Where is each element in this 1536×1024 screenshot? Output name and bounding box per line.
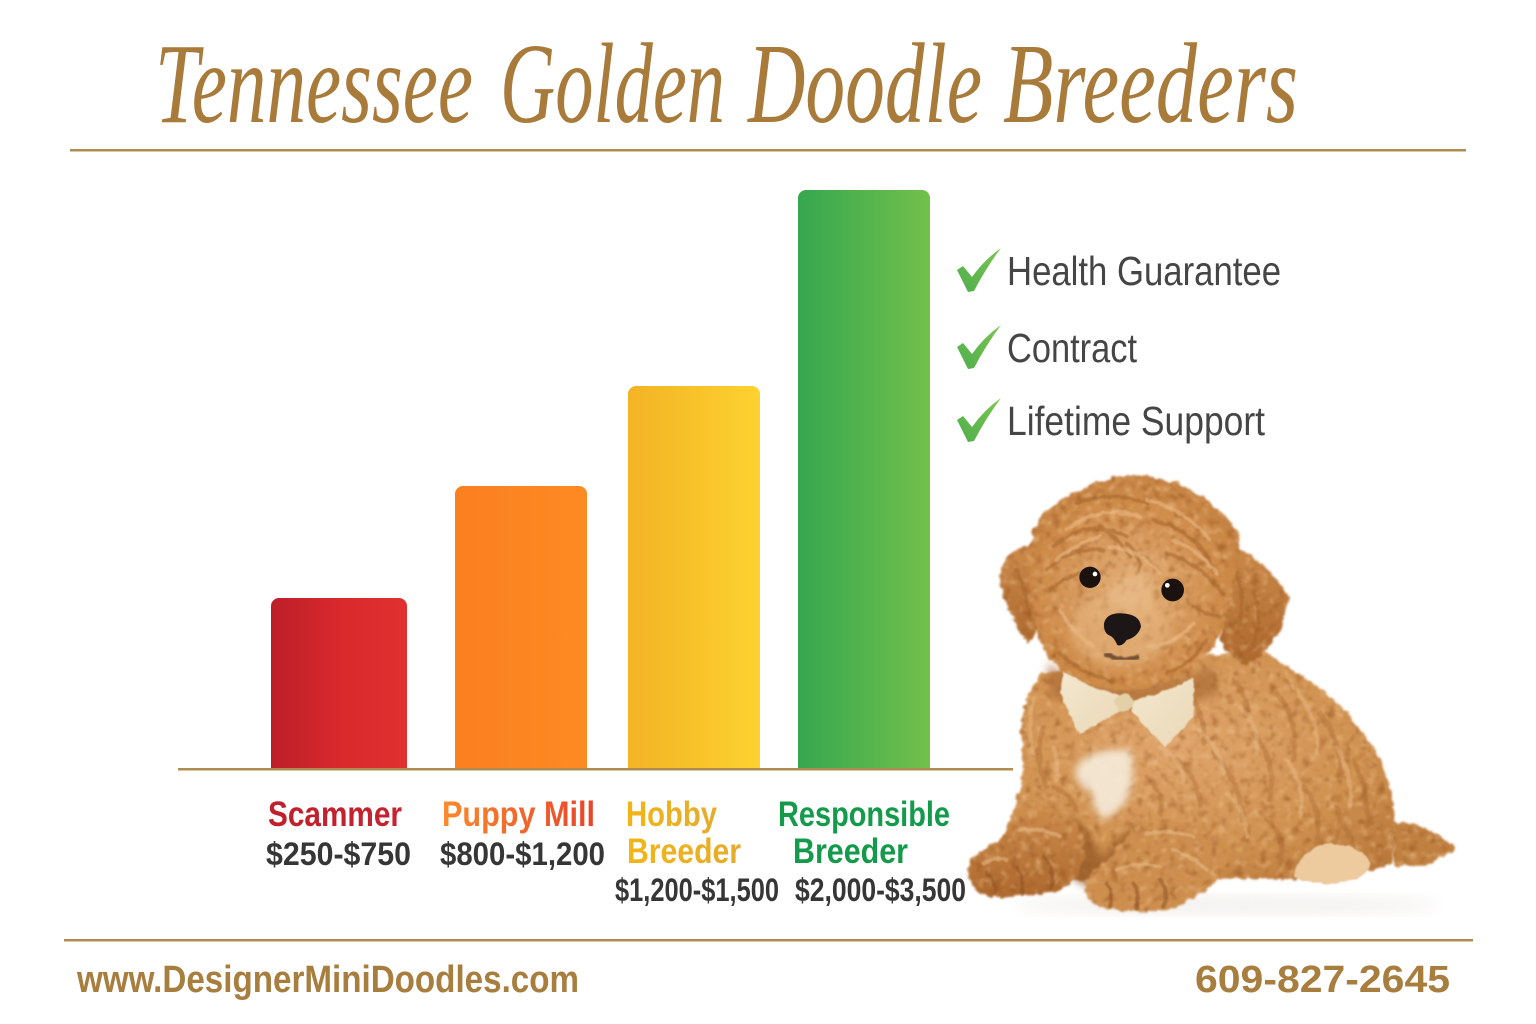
checklist	[957, 248, 1281, 444]
title: Breeders	[1003, 20, 1298, 147]
head	[1029, 475, 1241, 690]
left eye	[1079, 567, 1101, 588]
title: Golden	[500, 20, 725, 147]
nose	[1104, 613, 1141, 646]
bar chart	[178, 190, 1013, 770]
tail	[1393, 822, 1457, 867]
left ear	[998, 543, 1056, 643]
leg fur detail	[983, 829, 1207, 908]
puppy illustration	[968, 475, 1457, 915]
phone number: 609-827-2645	[1195, 959, 1450, 1001]
label: Responsible Breeder: Responsible	[778, 795, 950, 834]
icon: check 3	[957, 398, 1001, 442]
text: Contract: Contract	[1007, 325, 1138, 371]
white chest	[1075, 750, 1133, 820]
bar: Responsible Breeder	[798, 190, 930, 769]
label: Puppy Mill	[440, 795, 605, 872]
mouth	[1107, 654, 1137, 659]
head fur detail	[1017, 497, 1258, 680]
label: Hobby Breeder: $1,200-$1,500	[615, 872, 779, 908]
left front leg and paw	[968, 810, 1085, 897]
website: www.DesignerMiniDoodles.com	[76, 959, 579, 1001]
bow tie	[1060, 672, 1194, 747]
icon: check 1	[957, 248, 1001, 292]
label: Scammer: $250-$750	[266, 836, 411, 872]
bar: Hobby Breeder	[628, 386, 760, 769]
title: Doodle	[747, 20, 982, 147]
label: Responsible Breeder	[778, 795, 966, 908]
leg shadow	[1070, 813, 1147, 890]
text: Health Guarantee: Health Guarantee	[1007, 248, 1281, 294]
right front leg and paw	[1085, 822, 1227, 911]
bar: Puppy Mill	[455, 486, 587, 769]
title: Tennessee	[155, 20, 473, 147]
label: Puppy Mill: Puppy Mill	[442, 795, 595, 834]
neck shadow	[1047, 663, 1220, 711]
title	[155, 20, 1298, 147]
label: Hobby Breeder	[615, 795, 779, 908]
footer rule	[64, 939, 1473, 942]
ground shadow	[1013, 895, 1440, 915]
body	[1000, 650, 1395, 882]
label: Scammer	[266, 795, 411, 872]
label: Puppy Mill: $800-$1,200	[440, 836, 605, 872]
text: Lifetime Support: Lifetime Support	[1007, 398, 1266, 444]
muzzle	[1070, 593, 1170, 667]
brow highlight	[1103, 572, 1153, 613]
body fur shading	[1030, 680, 1367, 863]
right ear	[1220, 543, 1288, 665]
label: Scammer: Scammer	[268, 795, 402, 834]
hind paw	[1293, 843, 1371, 884]
label: Responsible Breeder: $2,000-$3,500	[795, 872, 966, 908]
bar: Scammer	[271, 598, 407, 769]
label: Responsible Breeder: Breeder	[793, 832, 908, 871]
right eye	[1161, 579, 1184, 601]
label: Hobby Breeder: Breeder	[627, 832, 741, 871]
icon: check 2	[957, 325, 1001, 369]
label: Hobby Breeder: Hobby	[626, 795, 717, 834]
